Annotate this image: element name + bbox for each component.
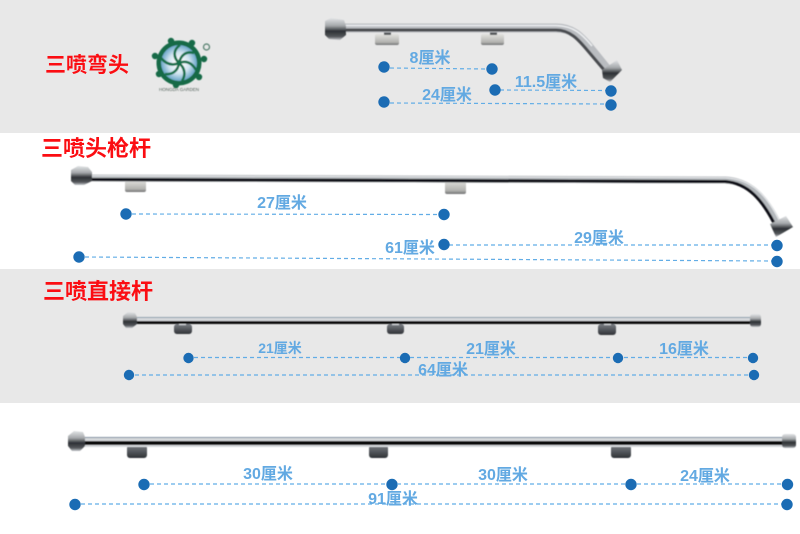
dimension: 30厘米 right xyxy=(397,466,637,490)
dimension: 24厘米 xyxy=(378,86,617,111)
heading: 三喷直接杆: 三喷直接杆 xyxy=(43,279,153,304)
dimension: 30厘米 left: 30厘米 xyxy=(243,465,293,483)
dimension: 8厘米: 8厘米 xyxy=(410,49,450,67)
straight pipe 64cm xyxy=(123,312,761,335)
dimension: 24厘米: 24厘米 xyxy=(680,467,730,485)
panel: 三喷直接杆 91cm xyxy=(68,431,796,510)
dimension: 24厘米: 24厘米 xyxy=(422,86,472,104)
bent three-nozzle pipe xyxy=(325,18,622,82)
dimension: 11.5厘米 xyxy=(489,73,617,97)
dimension: 29厘米: 29厘米 xyxy=(574,229,624,247)
dimension: 27厘米 xyxy=(120,194,450,220)
icon: brand logo xyxy=(152,38,210,92)
dimension: 16厘米 xyxy=(624,340,758,363)
dimension: 30厘米 right: 30厘米 xyxy=(478,466,528,484)
heading: 三喷弯头: 三喷弯头 xyxy=(45,53,129,77)
dimension: 30厘米 left xyxy=(138,465,398,490)
panel: 三喷头枪杆 xyxy=(41,136,793,267)
dimension: 24厘米 xyxy=(637,467,793,490)
dimension: 64厘米: 64厘米 xyxy=(418,361,468,379)
dimension: 16厘米: 16厘米 xyxy=(659,340,709,358)
dimension: 29厘米 xyxy=(438,229,783,251)
panel: 三喷直接杆 64cm xyxy=(43,279,761,380)
dimension: 8厘米 xyxy=(378,49,498,75)
straight pipe 91cm xyxy=(68,431,796,458)
dimension: 91厘米 xyxy=(69,490,793,510)
dimension: 27厘米: 27厘米 xyxy=(257,194,307,212)
dimension: 61厘米 xyxy=(73,239,783,267)
dimension: 21厘米 right: 21厘米 xyxy=(466,340,516,358)
dimension: 11.5厘米: 11.5厘米 xyxy=(515,73,577,91)
heading: 三喷头枪杆: 三喷头枪杆 xyxy=(41,136,151,161)
dimension: 61厘米: 61厘米 xyxy=(385,239,435,257)
dimension: 21厘米 left: 21厘米 xyxy=(258,340,302,356)
dimension: 64厘米 xyxy=(124,361,759,380)
panel: 三喷弯头 xyxy=(45,18,622,111)
dimension: 21厘米 right xyxy=(410,340,623,363)
icon: brand logo: HONGDA GARDEN xyxy=(159,87,199,92)
dimension: 91厘米: 91厘米 xyxy=(368,490,418,508)
long bent pipe xyxy=(71,166,793,237)
dimension: 21厘米 left xyxy=(183,340,410,363)
